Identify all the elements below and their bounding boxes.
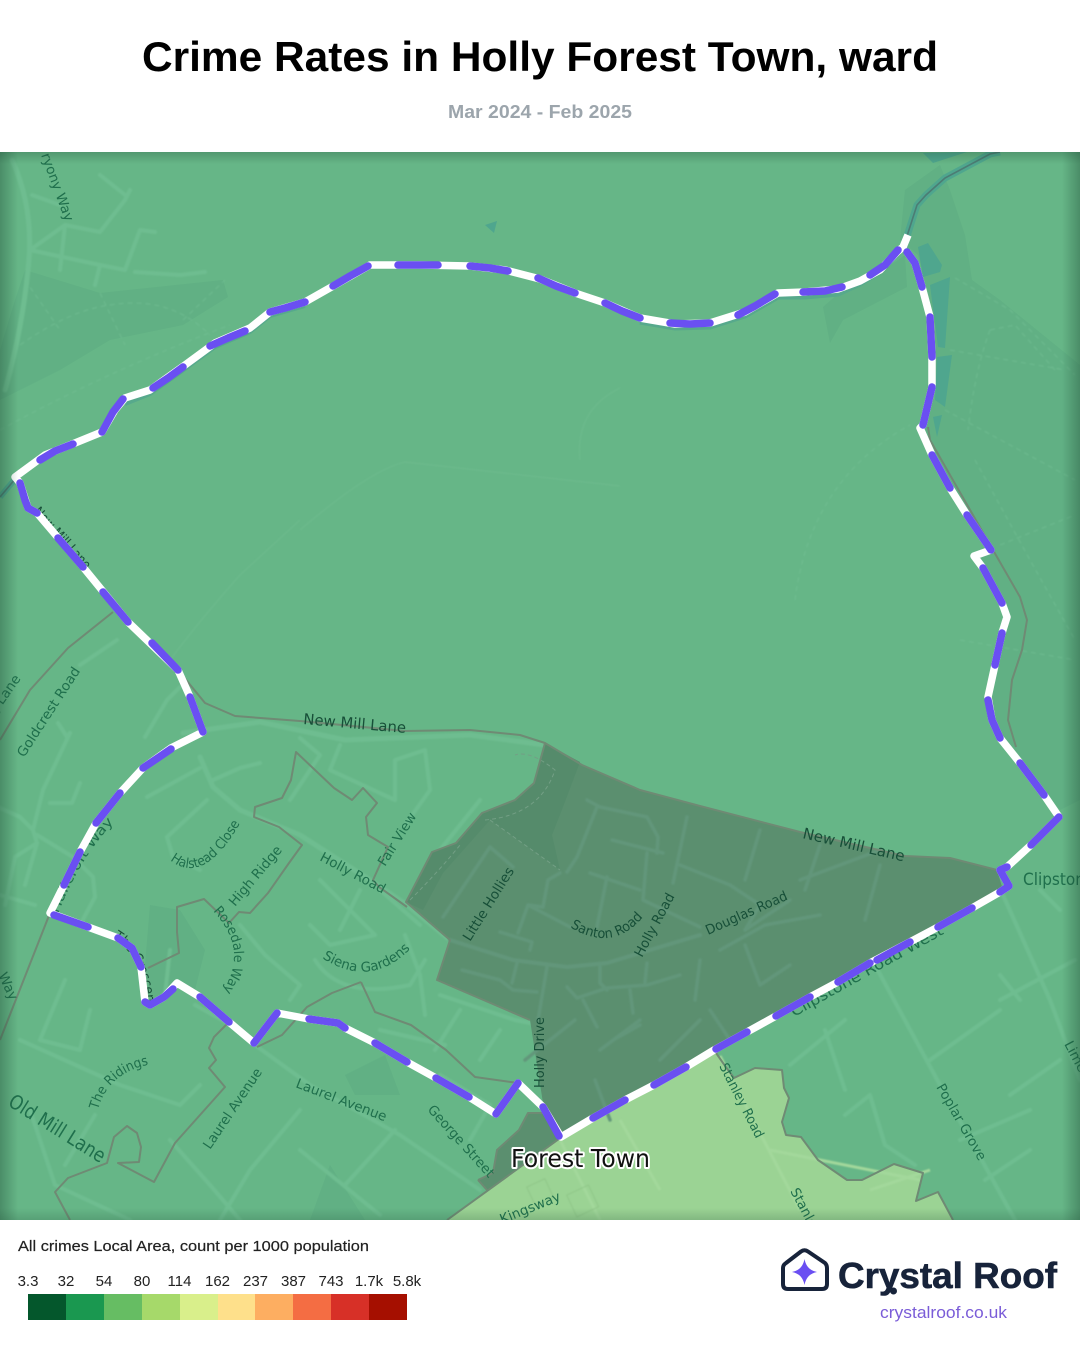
street labels: Holly Drive — [532, 1017, 548, 1088]
dark tail polygon — [480, 1114, 557, 1190]
street labels: New Mill Lane — [303, 710, 407, 737]
street labels: Douglas Road — [703, 888, 790, 939]
legend values: 32 — [58, 1273, 74, 1290]
street labels: Rosedale Way — [214, 906, 244, 994]
map vignette — [0, 152, 1080, 1220]
legend title: All crimes Local Area, count per 1000 population — [18, 1238, 369, 1255]
legend values: 387 — [281, 1273, 306, 1290]
ward boundary: white base line — [15, 235, 1059, 1137]
footpaths — [0, 278, 1075, 660]
street labels: Holly Road — [317, 849, 388, 897]
street labels: Stanley Road — [715, 1061, 767, 1141]
legend values: 237 — [243, 1273, 268, 1290]
river course — [0, 152, 1000, 497]
subtitle: date range: Mar 2024 - Feb 2025 — [448, 102, 632, 122]
key detail on wordmark y — [890, 1288, 897, 1294]
street labels: Stanley — [786, 1185, 824, 1238]
street labels: Santon Road — [571, 911, 642, 938]
faint park lines — [170, 388, 620, 660]
street labels: Hallcroft Way — [55, 818, 112, 912]
street labels: ryony Way — [37, 151, 77, 223]
legend values — [18, 1273, 422, 1290]
roads inside dark polygon — [443, 800, 880, 1120]
legend scale — [18, 1273, 422, 1320]
street labels: The Crescent — [118, 930, 154, 1000]
place label: Forest Town: Forest Town — [511, 1144, 650, 1173]
legend values: 80 — [134, 1273, 150, 1290]
street labels: Siena Gardens — [323, 944, 410, 972]
street labels: Little Hollies — [460, 864, 518, 944]
woodland patches — [0, 165, 1080, 1220]
street labels: Holly Road — [631, 891, 678, 960]
street labels: Kingsway — [498, 1189, 563, 1228]
street labels: Goldcrest Road — [14, 664, 84, 760]
street labels: Fair View — [375, 810, 420, 869]
street labels: Laurel Avenue — [294, 1076, 389, 1125]
legend values: 162 — [205, 1273, 230, 1290]
mid crime area: light green polygon — [447, 1050, 953, 1220]
dark woodland in high crime area — [566, 754, 580, 762]
legend values: 5.8k — [393, 1273, 422, 1290]
map background: low crime green area — [0, 152, 1080, 1220]
street labels: George Street — [424, 1102, 497, 1181]
area boundary lines — [0, 427, 1027, 1220]
street labels: Poplar Grove — [933, 1081, 989, 1163]
legend values: 3.3 — [18, 1273, 38, 1290]
road network — [0, 160, 1080, 1220]
icon: house with star — [783, 1250, 827, 1289]
logo: Crystal Roof — [783, 1250, 1058, 1322]
legend values: 1.7k — [355, 1273, 384, 1290]
ward boundary: purple dashes — [20, 250, 1059, 1136]
title: Crime Rates in Holly Forest Town, ward — [142, 33, 938, 80]
website address: crystalroof.co.uk — [880, 1304, 1008, 1322]
street labels: Halstead Close — [171, 821, 240, 868]
street labels: New Mill Lane — [801, 824, 906, 865]
street labels: Clipstone Road West — [787, 921, 946, 1020]
legend colour bar — [28, 1294, 407, 1320]
wordmark: Crystal Roof — [838, 1255, 1058, 1296]
street labels: High Ridge — [226, 843, 286, 910]
street labels: New Mill Lane — [30, 504, 94, 573]
high crime area: dark polygon — [406, 743, 1003, 1136]
legend values: 54 — [96, 1273, 112, 1290]
street labels: Laurel Avenue — [200, 1065, 266, 1152]
footpaths in woodland — [410, 754, 560, 900]
street labels: The Ridings — [88, 1058, 148, 1108]
legend values: 114 — [168, 1273, 191, 1290]
legend values: 743 — [318, 1273, 344, 1290]
street labels: Old Mill Lane — [4, 1089, 110, 1168]
river and ponds — [485, 152, 967, 437]
roads inside light polygon — [720, 1055, 931, 1174]
